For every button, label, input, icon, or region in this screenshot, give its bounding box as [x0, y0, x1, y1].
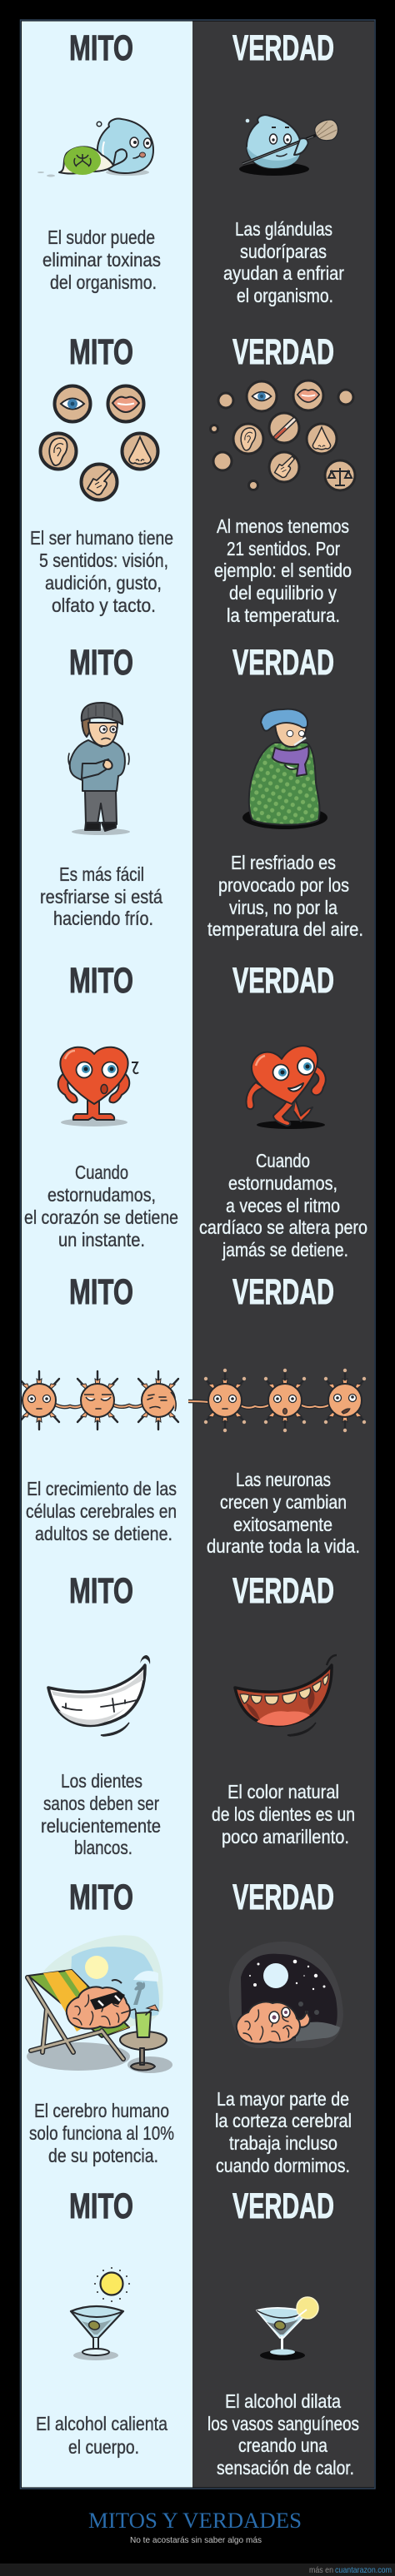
- text: verdad 2: ejemplo: el sentido: [214, 559, 352, 581]
- row 8: alcohol: [36, 2186, 359, 2479]
- text: mito 4: el corazón se detiene: [24, 1206, 178, 1228]
- text: mito 7: solo funciona al 10%: [29, 2122, 174, 2144]
- source bar: [0, 2564, 395, 2576]
- text: verdad 6: de los dientes es un: [212, 1803, 355, 1825]
- heading verdad 2: VERDAD: [232, 332, 334, 372]
- heading mito 5: MITO: [69, 1272, 133, 1312]
- icon: brain awake at night: [229, 1942, 343, 2048]
- text: verdad 7: [215, 2088, 352, 2176]
- text: mito 6: [41, 1770, 161, 1858]
- text: mito 2: olfato y tacto.: [52, 594, 156, 616]
- text: verdad 3: provocado por los: [218, 874, 349, 896]
- icon: white smile: [48, 1655, 150, 1736]
- text: verdad 8: El alcohol dilata: [225, 2390, 341, 2412]
- row 2: senses: [30, 332, 355, 626]
- icon: standing heart: [58, 1047, 138, 1126]
- text: mito 1: del organismo.: [50, 271, 157, 293]
- icon: three neurons holding hands: [19, 1371, 178, 1430]
- footer subtitle: No te acostarás sin saber algo más: [130, 2535, 262, 2545]
- text: verdad 5: durante toda la vida.: [207, 1535, 360, 1557]
- text: mito 3: haciendo frío.: [53, 908, 153, 929]
- text: mito 7: de su potencia.: [48, 2145, 158, 2166]
- heading verdad 5: VERDAD: [232, 1272, 334, 1312]
- text: mito 6: Los dientes: [61, 1770, 142, 1792]
- icon: sick person in blanket: [242, 709, 328, 829]
- icon: man in the cold: [68, 703, 130, 835]
- footer title: MITOS Y VERDADES: [88, 2509, 302, 2533]
- icon group: twenty-one senses: [210, 380, 355, 490]
- heading mito 3: MITO: [69, 643, 133, 683]
- text: verdad 8: sensación de calor.: [217, 2457, 354, 2479]
- text: mito 2: [30, 527, 173, 616]
- text: verdad 4: [199, 1150, 368, 1261]
- text: mito 3: [40, 863, 162, 929]
- text: mito 4: [24, 1161, 178, 1251]
- icon: drop with fan: [239, 115, 338, 176]
- heading mito 8: MITO: [69, 2186, 133, 2226]
- text: verdad 1: sudoríparas: [240, 241, 327, 262]
- heading mito 4: MITO: [69, 961, 133, 1001]
- text: mito 6: sanos deben ser: [43, 1793, 159, 1814]
- text: verdad 1: Las glándulas: [235, 218, 332, 240]
- text: verdad 6: poco amarillento.: [222, 1826, 349, 1847]
- row 1: sweat: [38, 28, 344, 306]
- text: mito 4: Cuando: [75, 1161, 128, 1183]
- text: verdad 8: creando una: [238, 2434, 328, 2456]
- text: mito 7: [29, 2100, 174, 2166]
- text: mito 4: estornudamos,: [48, 1184, 156, 1206]
- icon: brain on a deck chair: [27, 1935, 172, 2073]
- panel: mito column: [22, 22, 192, 2488]
- row 3: cold: [40, 643, 363, 940]
- row 5: neurons: [19, 1272, 366, 1557]
- text: verdad 8: [208, 2390, 359, 2479]
- text: mito 1: eliminar toxinas: [42, 249, 161, 271]
- text: verdad 5: Las neuronas: [236, 1469, 331, 1490]
- heading verdad 1: VERDAD: [232, 28, 334, 68]
- text: verdad 4: Cuando: [256, 1150, 310, 1171]
- text: mito 8: el cuerpo.: [68, 2436, 139, 2458]
- icon: martini with sun: [71, 2267, 130, 2360]
- text: verdad 6: El color natural: [228, 1781, 339, 1803]
- row 7: brain: [27, 1877, 352, 2176]
- text: verdad 3: El resfriado es: [231, 852, 336, 873]
- text: verdad 2: Al menos tenemos: [217, 515, 349, 537]
- text: verdad 7: trabaja incluso: [229, 2132, 338, 2154]
- text: verdad 7: cuando dormimos.: [216, 2155, 350, 2176]
- row 4: heart: [24, 961, 368, 1261]
- row 6: teeth: [41, 1571, 355, 1858]
- heading verdad 8: VERDAD: [232, 2186, 334, 2226]
- text: mito 7: El cerebro humano: [34, 2100, 169, 2121]
- text: mito 6: blancos.: [74, 1837, 132, 1858]
- heading verdad 4: VERDAD: [232, 961, 334, 1001]
- text: verdad 5: [207, 1469, 360, 1557]
- text: verdad 3: [208, 852, 363, 940]
- text: verdad 6: [212, 1781, 355, 1847]
- text: verdad 1: el organismo.: [237, 285, 333, 306]
- text: verdad 2: del equilibrio y: [229, 582, 337, 604]
- icon group: five senses: [40, 386, 158, 500]
- source bar: más en: [309, 2565, 333, 2575]
- text: mito 5: [26, 1478, 177, 1544]
- heading mito 2: MITO: [69, 332, 133, 372]
- heading mito 1: MITO: [69, 28, 133, 68]
- text: mito 4: un instante.: [58, 1229, 145, 1251]
- text: mito 2: El ser humano tiene: [30, 527, 173, 549]
- heading mito 7: MITO: [69, 1877, 133, 1917]
- text: verdad 7: la corteza cerebral: [215, 2110, 352, 2131]
- text: verdad 2: [214, 515, 352, 626]
- text: mito 2: audición, gusto,: [45, 572, 162, 594]
- text: mito 8: [36, 2413, 168, 2458]
- text: mito 1: El sudor puede: [48, 226, 155, 248]
- text: mito 8: El alcohol calienta: [36, 2413, 168, 2434]
- icon: yellow-toothed mouth: [235, 1655, 337, 1736]
- heading verdad 6: VERDAD: [232, 1571, 334, 1611]
- heading verdad 3: VERDAD: [232, 643, 334, 683]
- text: mito 5: El crecimiento de las: [27, 1478, 177, 1499]
- text: verdad 5: exitosamente: [233, 1514, 332, 1535]
- text: verdad 4: cardíaco se altera pero: [199, 1216, 368, 1238]
- heading verdad 7: VERDAD: [232, 1877, 334, 1917]
- text: mito 2: 5 sentidos: visión,: [39, 550, 168, 571]
- text: verdad 2: 21 sentidos. Por: [227, 538, 340, 559]
- text: mito 6: relucientemente: [41, 1815, 161, 1837]
- panel: verdad column: [192, 22, 374, 2488]
- text: verdad 4: a veces el ritmo: [226, 1195, 340, 1216]
- text: verdad 5: crecen y cambian: [220, 1491, 347, 1513]
- text: mito 5: adultos se detiene.: [35, 1523, 172, 1544]
- text: verdad 1: ayudan a enfriar: [223, 262, 344, 284]
- icon: martini with lemon: [257, 2297, 318, 2360]
- text: mito 5: células cerebrales en: [26, 1500, 177, 1522]
- text: verdad 2: la temperatura.: [227, 604, 340, 626]
- text: verdad 8: los vasos sanguíneos: [208, 2413, 359, 2434]
- text: verdad 1: [223, 218, 344, 306]
- heading mito 6: MITO: [69, 1571, 133, 1611]
- text: verdad 3: virus, no por la: [229, 897, 338, 918]
- text: mito 3: resfriarse si está: [40, 886, 162, 908]
- text: mito 1: [42, 226, 161, 293]
- text: verdad 3: temperatura del aire.: [208, 918, 363, 940]
- text: verdad 7: La mayor parte de: [217, 2088, 349, 2110]
- icon: walking heart: [246, 1046, 326, 1129]
- text: verdad 4: estornudamos,: [228, 1172, 338, 1194]
- icon: drop pushing toxic bag: [38, 119, 153, 177]
- icon: three neurons with pointing arm: [188, 1369, 366, 1432]
- text: mito 3: Es más fácil: [59, 863, 144, 885]
- text: verdad 4: jamás se detiene.: [222, 1239, 348, 1261]
